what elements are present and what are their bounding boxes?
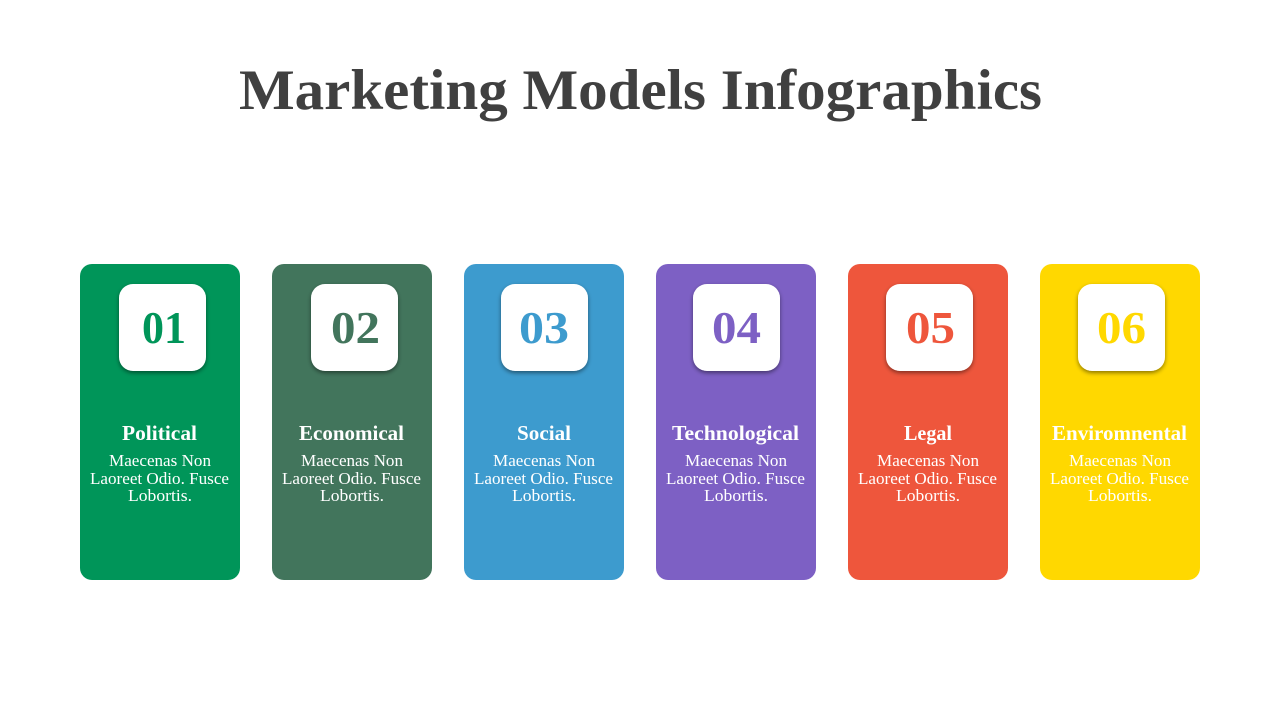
description: Lobortis. xyxy=(512,486,576,505)
description: Maecenas Non xyxy=(493,451,595,470)
description: Lobortis. xyxy=(896,486,960,505)
description: Maecenas Non xyxy=(109,451,211,470)
number badge 06: 06 xyxy=(1097,302,1146,353)
description: Maecenas Non xyxy=(685,451,787,470)
number badge 01 xyxy=(119,284,206,371)
number badge 05 xyxy=(886,284,973,371)
panel: 04 Technological xyxy=(656,264,816,580)
description xyxy=(474,451,613,505)
heading: Legal: Legal xyxy=(904,421,952,445)
number badge 02 xyxy=(311,284,398,371)
heading: Economical: Economical xyxy=(299,421,404,445)
panel: 05 Legal xyxy=(848,264,1008,580)
description: Lobortis. xyxy=(128,486,192,505)
number badge 03 xyxy=(501,284,588,371)
panel: 06 Environmental xyxy=(1040,264,1200,580)
description: Laoreet Odio. Fusce xyxy=(282,469,421,488)
description: Laoreet Odio. Fusce xyxy=(666,469,805,488)
number badge 02: 02 xyxy=(331,302,380,353)
description: Laoreet Odio. Fusce xyxy=(90,469,229,488)
panel: 02 Economical xyxy=(272,264,432,580)
panel: 01 Political xyxy=(80,264,240,580)
number badge 04 xyxy=(693,284,780,371)
number badge 06 xyxy=(1078,284,1165,371)
description: Lobortis. xyxy=(704,486,768,505)
number badge 03: 03 xyxy=(519,302,569,353)
description: Lobortis. xyxy=(1088,486,1152,505)
description xyxy=(1050,451,1189,505)
heading: Social: Social xyxy=(517,421,571,445)
description: Maecenas Non xyxy=(877,451,979,470)
description xyxy=(90,451,229,505)
title: Marketing Models Infographics xyxy=(239,59,1042,122)
description: Maecenas Non xyxy=(301,451,403,470)
description: Laoreet Odio. Fusce xyxy=(474,469,613,488)
description: Laoreet Odio. Fusce xyxy=(858,469,997,488)
number badge 05: 05 xyxy=(906,302,955,353)
description: Lobortis. xyxy=(320,486,384,505)
description: Maecenas Non xyxy=(1069,451,1171,470)
heading: Technological: Technological xyxy=(672,421,799,445)
heading: Political: Political xyxy=(122,421,197,445)
number badge 01: 01 xyxy=(142,302,186,353)
number badge 04: 04 xyxy=(712,302,761,353)
description xyxy=(858,451,997,505)
description xyxy=(666,451,805,505)
panel: 03 Social xyxy=(464,264,624,580)
description xyxy=(282,451,421,505)
description: Laoreet Odio. Fusce xyxy=(1050,469,1189,488)
heading: Enviromnental: Enviromnental xyxy=(1052,421,1187,445)
